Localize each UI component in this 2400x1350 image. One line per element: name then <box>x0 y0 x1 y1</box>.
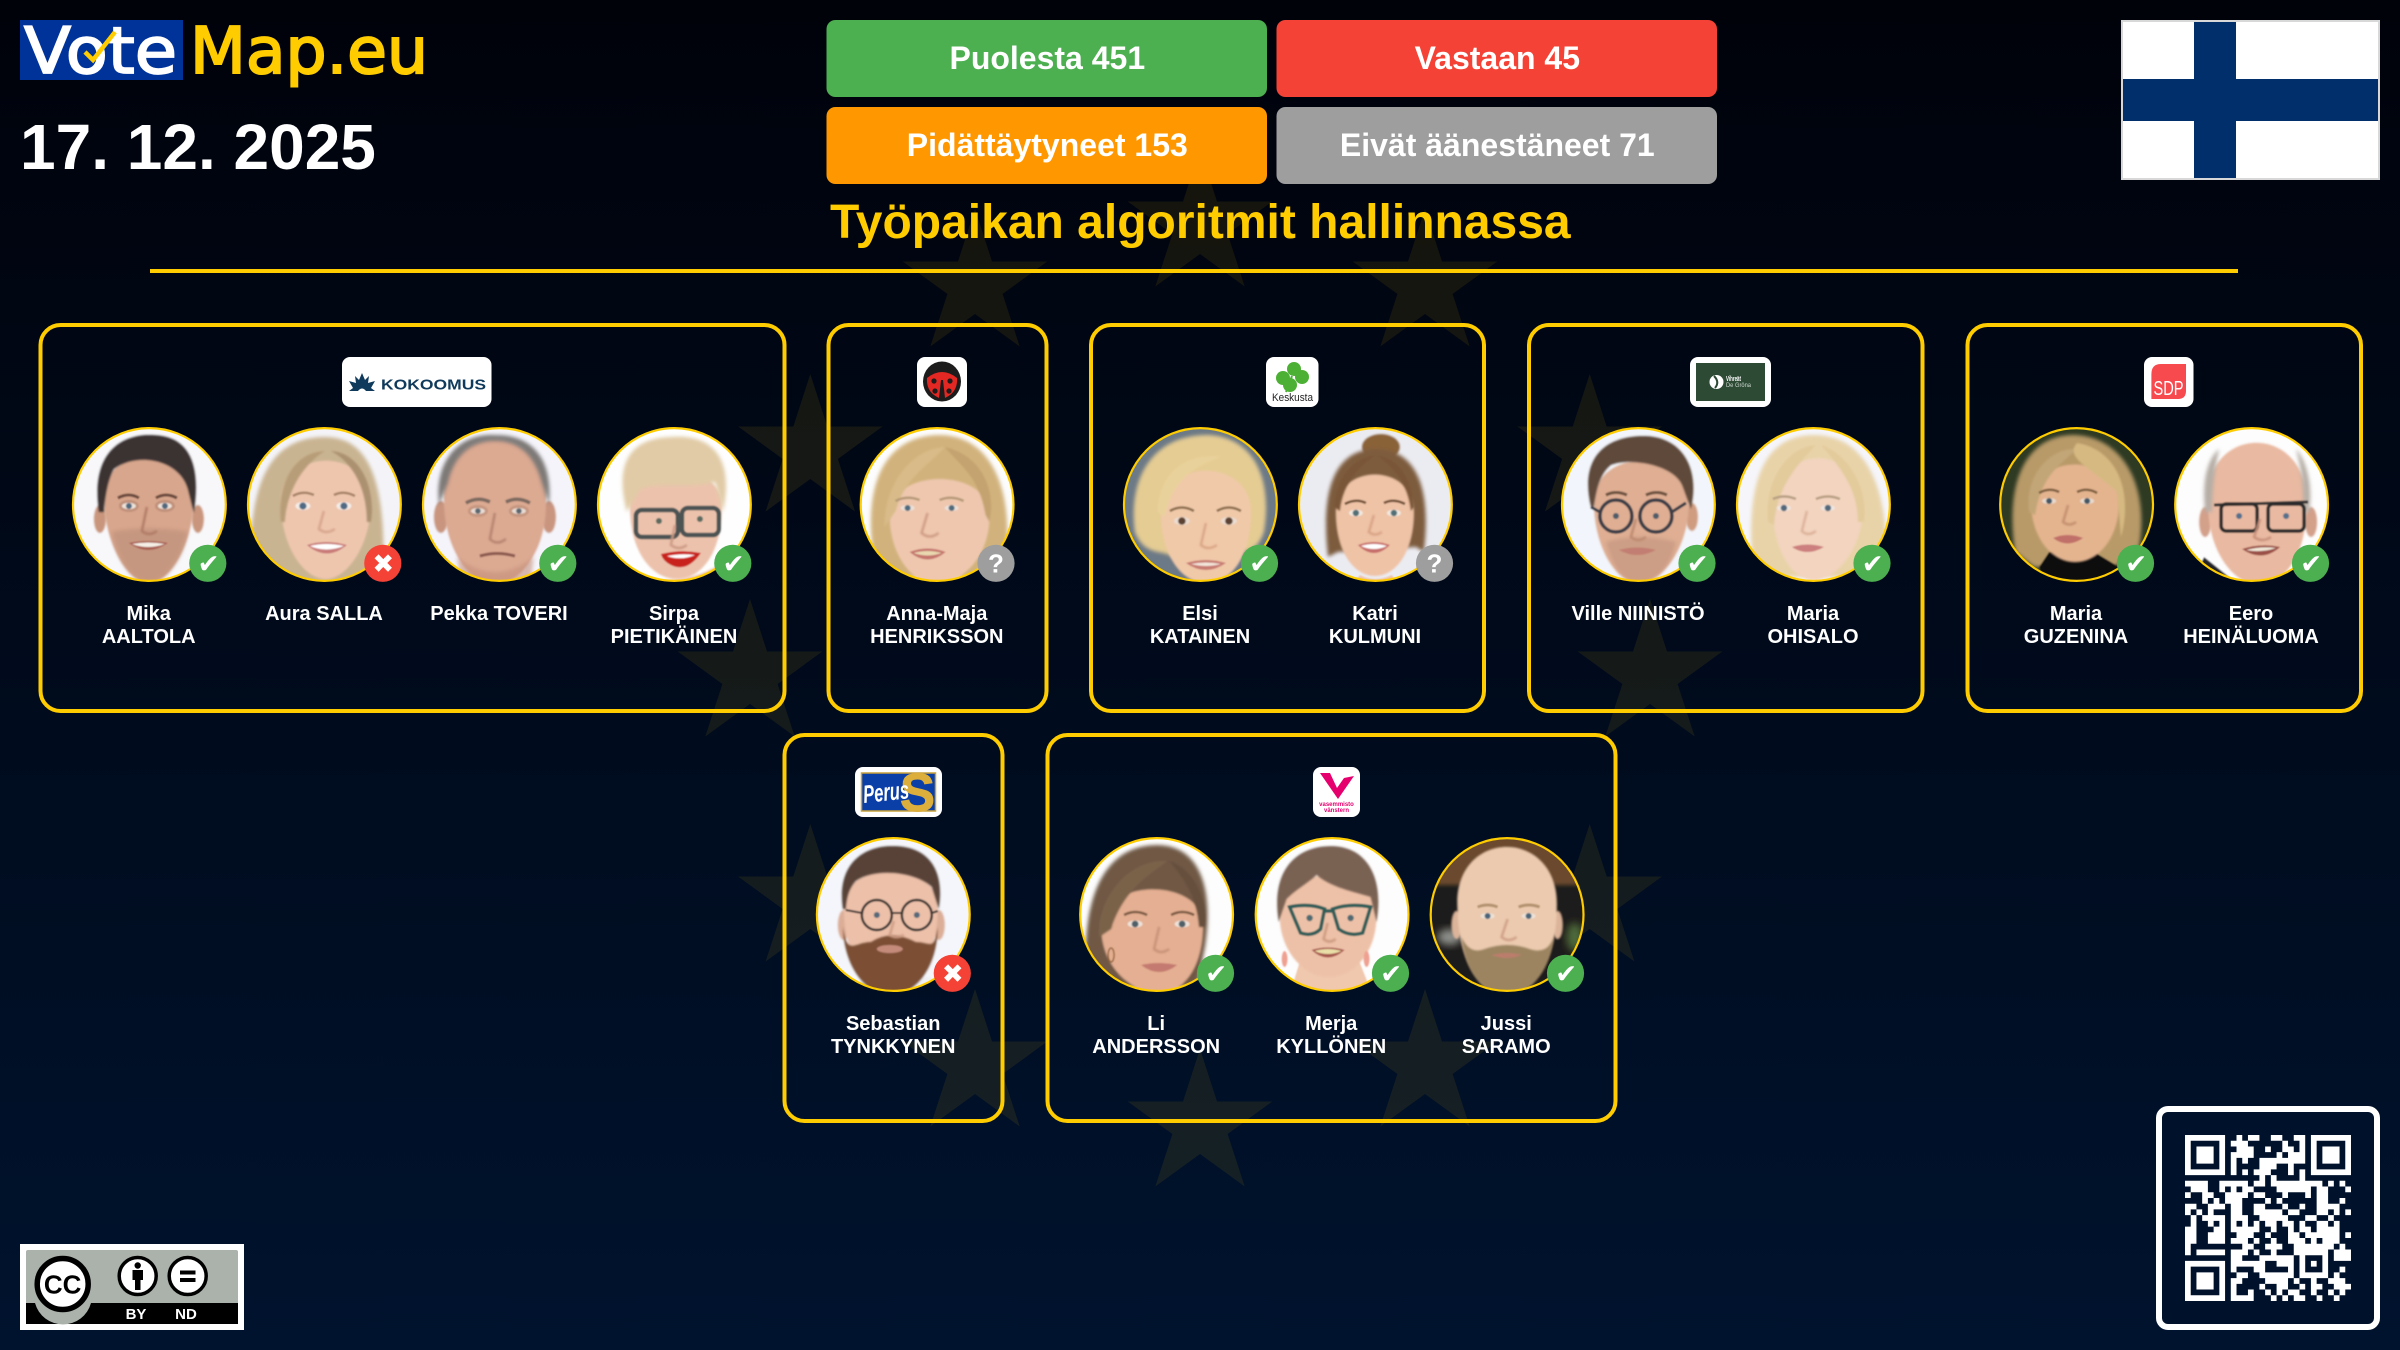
logo: VoteMap.eu: Map.eu <box>190 15 428 89</box>
logo: VoteMap.eu: Vote <box>24 15 177 89</box>
photo: Mika Aaltola <box>72 427 227 583</box>
vote badge: did not vote: ? <box>988 548 1004 578</box>
name: Li <box>1147 1013 1165 1035</box>
panel: SDP <box>1968 325 2361 711</box>
vote badge: for <box>2292 545 2329 582</box>
vote badge: against: ✖ <box>942 960 964 990</box>
member: Pekka TOVERI <box>422 427 577 625</box>
licence badge: CC BY-ND: CC <box>44 1270 82 1300</box>
panel: Perussuomalaiset <box>784 735 1002 1121</box>
photo: Jussi Saramo <box>1430 837 1585 995</box>
party logo: Vasemmistoliitto <box>1313 767 1360 817</box>
photo: Eero Heinäluoma <box>2174 427 2329 587</box>
vote badge: for: ✔ <box>2300 550 2322 580</box>
panel: Vihreät <box>1529 325 1922 711</box>
photo: Katri Kulmuni <box>1298 427 1453 585</box>
party logo: Vasemmistoliitto: vasemmisto <box>1319 802 1354 808</box>
photo: Aura Salla <box>247 427 402 582</box>
member: Eero HEINÄLUOMA <box>2174 427 2329 648</box>
photo: Ville Niinistö <box>1561 427 1716 583</box>
name: Merja <box>1305 1013 1358 1035</box>
party logo: Kokoomus: KOKOOMUS <box>381 376 486 394</box>
name: KATAINEN <box>1150 626 1250 648</box>
photo: Li Andersson <box>1079 837 1234 993</box>
vote badge: for: ✔ <box>1555 960 1577 990</box>
panel: Vasemmistoliitto <box>1048 735 1616 1121</box>
member: Mika AALTOLA <box>72 427 227 648</box>
vote badge: did not vote: ? <box>1427 548 1442 578</box>
vote badge: for <box>539 545 576 582</box>
photo: Pekka Toveri <box>422 427 577 585</box>
name: SARAMO <box>1462 1036 1551 1058</box>
party logo: SDP: SDP <box>2154 378 2184 400</box>
total: against <box>1276 20 1717 97</box>
vote badge: against <box>364 545 401 582</box>
photo: Maria Ohisalo <box>1736 427 1891 582</box>
name: Jussi <box>1481 1013 1532 1035</box>
party logo: Vasemmistoliitto: vänstern <box>1324 808 1349 814</box>
name: Aura SALLA <box>265 603 383 625</box>
name: Maria <box>2050 603 2103 625</box>
name: HEINÄLUOMA <box>2183 625 2319 648</box>
vote badge: for: ✔ <box>2125 550 2147 580</box>
date: 17. 12. 2025 <box>20 111 376 183</box>
party logo: ladybird <box>917 357 967 407</box>
member: Maria OHISALO <box>1736 427 1891 648</box>
name: Elsi <box>1182 603 1218 625</box>
total: against: Vastaan 45 <box>1415 40 1580 76</box>
member: Sebastian TYNKKYNEN <box>816 837 971 1058</box>
party logo: Perussuomalaiset: S <box>900 763 935 823</box>
vote badge: against: ✖ <box>372 550 394 580</box>
name: KULMUNI <box>1329 626 1421 648</box>
name: Anna-Maja <box>886 603 988 625</box>
party logo: SDP <box>2144 357 2194 407</box>
vote badge: for <box>1197 955 1234 992</box>
name: Pekka TOVERI <box>430 603 568 625</box>
vote badge: for: ✔ <box>548 550 569 580</box>
vote badge: for: ✔ <box>723 550 744 580</box>
member: Li ANDERSSON <box>1079 837 1234 1058</box>
photo: Sebastian Tynkkynen <box>816 837 971 995</box>
vote totals <box>826 20 1717 184</box>
vote badge: for: ✔ <box>1249 550 1271 580</box>
name: AALTOLA <box>102 626 196 648</box>
panel: Keskusta <box>1091 325 1484 711</box>
vote badge: for <box>1241 545 1278 582</box>
name: GUZENINA <box>2024 626 2128 648</box>
member: Sirpa PIETIKÄINEN <box>597 427 752 648</box>
party logo: Vihreät: De Gröna <box>1726 383 1752 389</box>
member: Aura SALLA <box>247 427 402 625</box>
member: Jussi SARAMO <box>1430 837 1585 1058</box>
name: Ville NIINISTÖ <box>1572 602 1704 625</box>
name: ANDERSSON <box>1092 1036 1220 1058</box>
party logo: Perussuomalaiset <box>855 763 942 823</box>
name: Katri <box>1352 603 1398 625</box>
vote badge: for <box>2117 545 2154 582</box>
vote badge: for: ✔ <box>198 550 219 580</box>
flag: Finland <box>2121 20 2380 180</box>
member: Anna-Maja HENRIKSSON <box>860 427 1015 648</box>
party logo: Keskusta: Keskusta <box>1272 392 1314 404</box>
vote badge: for <box>1372 955 1409 992</box>
licence badge: CC BY-ND <box>20 1244 244 1330</box>
member: Elsi KATAINEN <box>1123 427 1278 648</box>
name: KYLLÖNEN <box>1276 1035 1386 1058</box>
name: Sebastian <box>846 1013 940 1035</box>
photo: Merja Kyllönen <box>1255 837 1410 995</box>
member: Merja KYLLÖNEN <box>1255 837 1410 1058</box>
vote badge: for: ✔ <box>1687 550 1709 580</box>
party logo: Vihreät: Vihreät <box>1726 376 1741 383</box>
total: abstained <box>826 107 1267 184</box>
name: HENRIKSSON <box>870 626 1003 648</box>
photo: Maria Guzenina <box>1999 427 2154 587</box>
total: did not vote <box>1276 107 1717 184</box>
QR code <box>2159 1109 2377 1327</box>
photo: Anna-Maja Henriksson <box>860 427 1015 583</box>
name: PIETIKÄINEN <box>611 625 737 648</box>
vote badge: for: ✔ <box>1862 550 1884 580</box>
total: abstained: Pidättäytyneet 153 <box>907 127 1188 163</box>
member: Ville NIINISTÖ <box>1561 427 1716 625</box>
vote badge: did not vote <box>977 545 1015 582</box>
name: Mika <box>126 603 172 625</box>
licence badge: CC BY-ND: BY <box>126 1306 146 1323</box>
vote badge: for <box>714 545 751 582</box>
vote badge: for <box>1853 545 1891 582</box>
photo: Sirpa Pietikäinen <box>597 427 752 587</box>
name: Eero <box>2229 603 2273 625</box>
logo: VoteMap.eu <box>20 15 428 89</box>
panel: Kristillisdemokraatit <box>828 325 1046 711</box>
member: Maria GUZENINA <box>1999 427 2154 648</box>
member: Katri KULMUNI <box>1298 427 1453 648</box>
title: Työpaikan algoritmit hallinnassa <box>830 196 1571 249</box>
EU stars circle <box>678 149 1722 1186</box>
vote badge: for <box>189 545 226 582</box>
licence badge: CC BY-ND: ND <box>175 1306 197 1323</box>
total: for: Puolesta 451 <box>949 40 1145 76</box>
vote badge: for <box>1678 545 1716 582</box>
total: did not vote: Eivät äänestäneet 71 <box>1340 127 1655 163</box>
photo: Elsi Katainen <box>1123 427 1278 583</box>
party logo: Vihreät <box>1690 357 1771 407</box>
vote badge: for <box>1547 955 1584 992</box>
name: Maria <box>1787 603 1840 625</box>
party logo: Keskusta <box>1266 357 1318 407</box>
vote badge: for: ✔ <box>1380 960 1402 990</box>
vote badge: did not vote <box>1416 545 1453 582</box>
name: Sirpa <box>649 603 700 625</box>
name: OHISALO <box>1767 626 1859 648</box>
panel: Kokoomus <box>40 325 784 711</box>
vote badge: for: ✔ <box>1205 960 1227 990</box>
party logo: Perussuomalaiset: Perus <box>862 776 910 809</box>
total: for <box>826 20 1267 97</box>
vote badge: against <box>934 955 971 992</box>
name: TYNKKYNEN <box>831 1036 955 1058</box>
party logo: Kokoomus <box>342 357 492 407</box>
